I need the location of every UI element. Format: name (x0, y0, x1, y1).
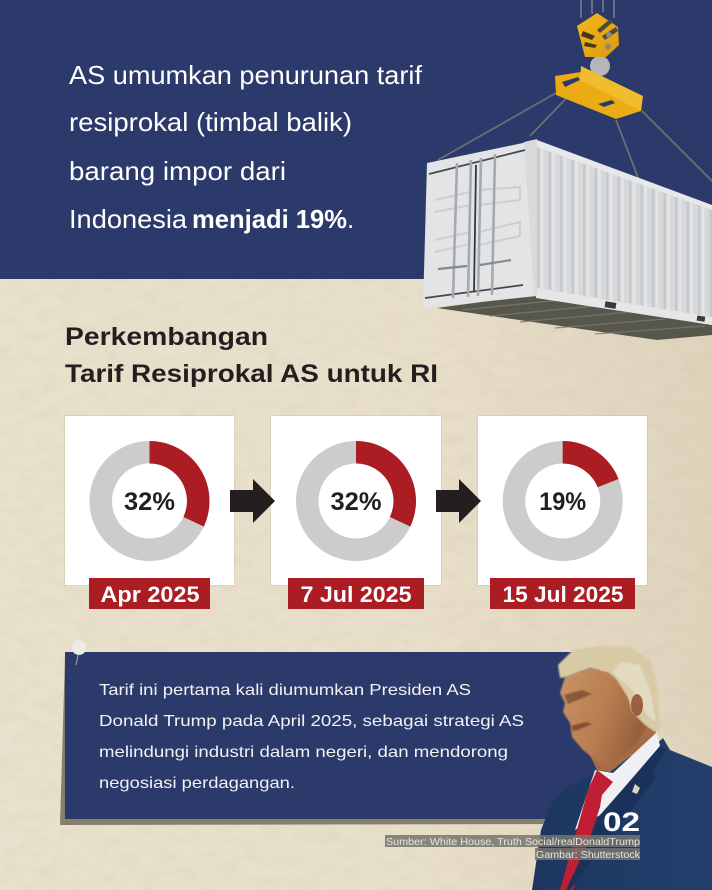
swivel (590, 56, 610, 76)
source credits: Sumber: White House, Truth Social/realDonaldTrump (386, 836, 640, 848)
donut chart: 32% (90, 441, 210, 561)
lapel pin (632, 784, 640, 794)
headline (69, 60, 423, 234)
callout panel (60, 652, 600, 825)
icon: push pin (72, 640, 86, 665)
donut chart: 19%: 19% (539, 488, 586, 516)
date label (89, 578, 210, 609)
lapel (566, 746, 667, 890)
crane cables (581, 0, 614, 18)
hair (558, 646, 660, 732)
callout text: melindungi industri dalam negeri, dan mendorong (99, 744, 508, 761)
sling wires (438, 82, 712, 181)
spreader bar (555, 66, 643, 119)
page number: 02 (603, 807, 640, 837)
headline: AS umumkan penurunan tarif (69, 60, 423, 90)
section title (65, 323, 438, 388)
arrow 2 (436, 479, 481, 523)
portrait: Donald Trump (532, 646, 712, 890)
illustration: container lifted by crane (423, 0, 712, 340)
date label: 7 Jul 2025 (300, 582, 412, 607)
container doors (423, 140, 537, 308)
date label: 15 Jul 2025 (502, 582, 624, 607)
callout text: Tarif ini pertama kali diumumkan Presiden AS (99, 682, 471, 699)
panel: Apr 2025 (64, 415, 235, 609)
container underside (437, 295, 712, 340)
section title: Tarif Resiprokal AS untuk RI (65, 360, 438, 388)
donut chart: 19% (503, 441, 623, 561)
donut chart: 32% (296, 441, 416, 561)
shirt collar (575, 732, 660, 830)
hook block (577, 13, 619, 57)
container side (537, 143, 712, 317)
panel: 15 Jul 2025 (477, 415, 648, 609)
suit (532, 738, 712, 890)
source credits (385, 835, 641, 861)
neck (585, 715, 658, 772)
face (560, 668, 648, 766)
headline: resiprokal (timbal balik) (69, 107, 352, 137)
date label (288, 578, 424, 609)
date label (490, 578, 635, 609)
callout text: Donald Trump pada April 2025, sebagai strategi AS (99, 713, 524, 730)
source credits: Gambar: Shutterstock (536, 849, 641, 861)
panel: 7 Jul 2025 (270, 415, 442, 609)
navy header band (0, 0, 712, 279)
date label: Apr 2025 (100, 582, 200, 607)
headline: menjadi 19% (192, 204, 347, 234)
headline: Indonesia (69, 204, 188, 234)
callout text: negosiasi perdagangan. (99, 775, 295, 792)
necktie (560, 770, 613, 890)
headline: barang impor dari (69, 156, 286, 186)
section title: Perkembangan (65, 323, 268, 351)
ear (631, 694, 643, 716)
donut chart: 32%: 32% (330, 488, 382, 516)
arrow 1 (230, 479, 275, 523)
donut chart: 32%: 32% (124, 488, 175, 516)
callout text (99, 682, 524, 792)
headline: . (347, 204, 354, 234)
